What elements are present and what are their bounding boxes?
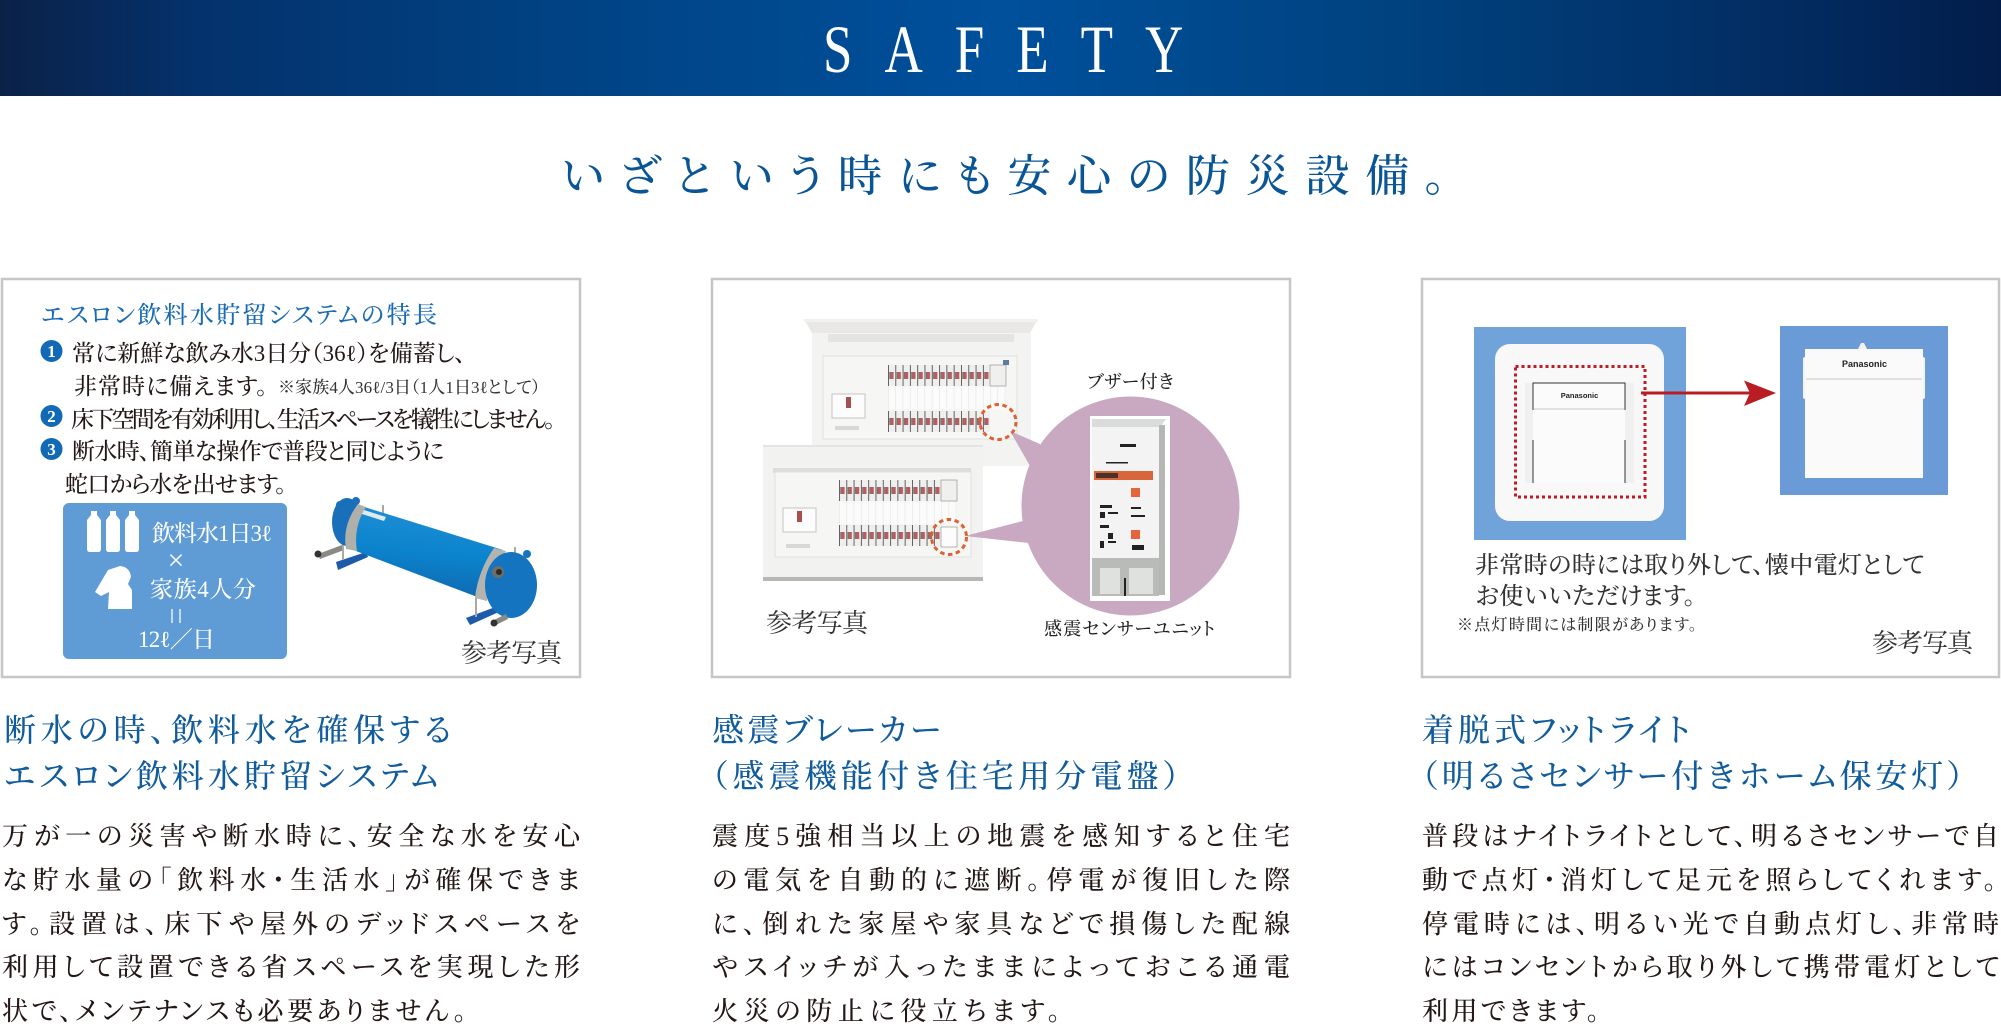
feature 2: 床下空間を有効利用し、生活スペースを犠牲にしません。 <box>71 407 556 432</box>
photo: water tank <box>314 497 537 626</box>
body text: 状で、メンテナンスも必要ありません。 <box>2 997 467 1026</box>
note text: お使いいただけます。 <box>1475 583 1696 610</box>
heading: （感震機能付き住宅用分電盤） <box>712 758 1179 794</box>
column: foot light <box>1422 279 1999 1026</box>
note text: ※点灯時間には制限があります。 <box>1457 616 1697 634</box>
body text: の電気を自動的に遮断。停電が復旧した際 <box>712 866 1291 895</box>
feature 1: ※家族4人36ℓ/3日（1人1日3ℓとして） <box>278 378 540 397</box>
callout: daily water: 飲料水1日3ℓ <box>152 521 272 546</box>
feature 3 <box>40 438 444 497</box>
body text: な貯水量の「飲料水・生活水」が確保できま <box>2 866 580 895</box>
dashed circle: front <box>932 520 966 554</box>
sensor unit <box>1090 416 1170 601</box>
caption: 参考写真 <box>766 609 869 638</box>
body text: にはコンセントから取り外して携帯電灯として <box>1422 953 1999 982</box>
note text: 非常時の時には取り外して、懐中電灯として <box>1475 552 1924 579</box>
body text: す。設置は、床下や屋外のデッドスペースを <box>2 910 580 939</box>
photo: removed light <box>1780 326 1948 495</box>
body text <box>2 822 582 1026</box>
body text: 震度5強相当以上の地震を感知すると住宅 <box>712 822 1290 851</box>
photo: mounted light: Panasonic <box>1561 391 1598 400</box>
panel: water storage features <box>2 279 580 677</box>
icon: bottles <box>87 511 139 552</box>
dashed circle: rear <box>980 404 1016 440</box>
caption: 参考写真 <box>461 639 563 668</box>
panel: foot light <box>1422 279 1999 677</box>
icon: person drinking <box>95 566 132 609</box>
heading <box>712 712 1179 794</box>
dotted outline <box>1516 366 1645 497</box>
heading: エスロン飲料水貯留システム <box>4 758 438 794</box>
feature 3: 3 <box>47 440 56 459</box>
feature 1 <box>40 340 540 399</box>
body text: 利用できます。 <box>1422 997 1600 1026</box>
feature 3: 蛇口から水を出せます。 <box>65 472 287 497</box>
arrow <box>1641 380 1776 406</box>
heading: 断水の時、飲料水を確保する <box>4 712 451 748</box>
feature 1: 常に新鮮な飲み水3日分（36ℓ）を備蓄し、 <box>72 341 466 366</box>
caption: 参考写真 <box>1872 629 1974 658</box>
callout: daily water: × <box>168 544 184 577</box>
subtitle: いざという時にも安心の防災設備。 <box>560 152 1447 201</box>
label: buzzer: ブザー付き <box>1087 372 1174 392</box>
heading: （明るさセンサー付きホーム保安灯） <box>1422 758 1963 794</box>
photo: removed light: Panasonic <box>1842 359 1887 369</box>
body text: やスイッチが入ったままによっておこる通電 <box>712 953 1290 982</box>
body text: 動で点灯・消灯して足元を照らしてくれます。 <box>1422 866 1997 895</box>
header band <box>0 0 2001 96</box>
callout: daily water: 12ℓ／日 <box>138 627 215 652</box>
body text: に、倒れた家屋や家具などで損傷した配線 <box>712 910 1290 939</box>
heading: 着脱式フットライト <box>1422 712 1690 748</box>
photo: mounted light <box>1474 327 1686 540</box>
note text <box>1457 552 1924 634</box>
photo: rear distribution board <box>804 319 1038 466</box>
column: water storage <box>2 279 582 1026</box>
body text: 万が一の災害や断水時に、安全な水を安心 <box>2 822 582 851</box>
body text <box>1422 822 1999 1026</box>
title: SAFETY <box>823 13 1183 88</box>
photo: front distribution board <box>763 445 983 581</box>
body text: 停電時には、明るい光で自動点灯し、非常時 <box>1422 910 1999 939</box>
body text <box>712 822 1291 1026</box>
body text: 火災の防止に役立ちます。 <box>712 997 1061 1026</box>
heading <box>4 712 451 794</box>
body text: 普段はナイトライトとして、明るさセンサーで自 <box>1422 822 1999 851</box>
feature 2: 2 <box>47 407 56 426</box>
callout: daily water <box>63 503 287 659</box>
feature 3: 断水時、簡単な操作で普段と同じように <box>72 439 444 464</box>
body text: 利用して設置できる省スペースを実現した形 <box>2 953 580 982</box>
feature 1: 非常時に備えます。 <box>74 374 268 399</box>
panel title: エスロン飲料水貯留システムの特長 <box>41 302 437 329</box>
column: breaker <box>712 279 1291 1026</box>
label: sensor unit: 感震センサーユニット <box>1044 619 1215 639</box>
heading: 感震ブレーカー <box>712 712 941 748</box>
heading <box>1422 712 1963 794</box>
panel: seismic breaker <box>712 279 1290 677</box>
feature 1: 1 <box>47 342 56 361</box>
magnified unit callout <box>965 396 1240 616</box>
callout: daily water: 家族4人分 <box>150 577 256 602</box>
